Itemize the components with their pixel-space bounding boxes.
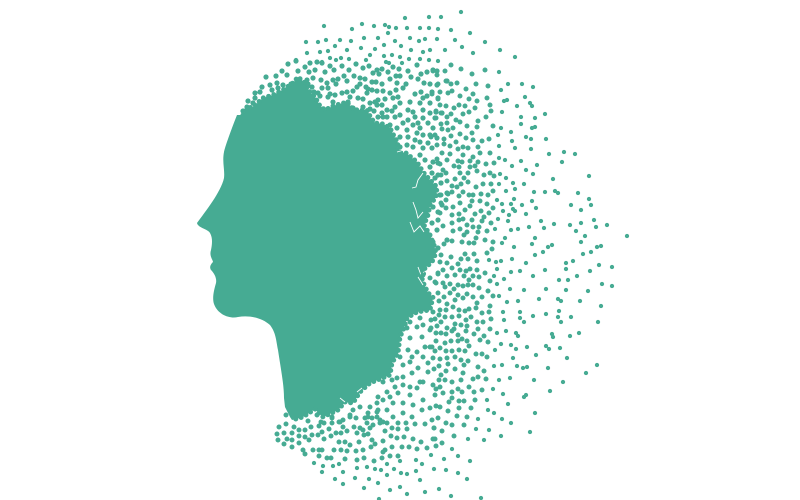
particles: right and lower right field xyxy=(332,65,494,439)
particles: dense inner field xyxy=(243,61,447,248)
particles: lower neck scatter xyxy=(277,412,442,461)
head silhouette xyxy=(197,77,437,420)
particles: outer sparse scatter xyxy=(288,12,627,499)
